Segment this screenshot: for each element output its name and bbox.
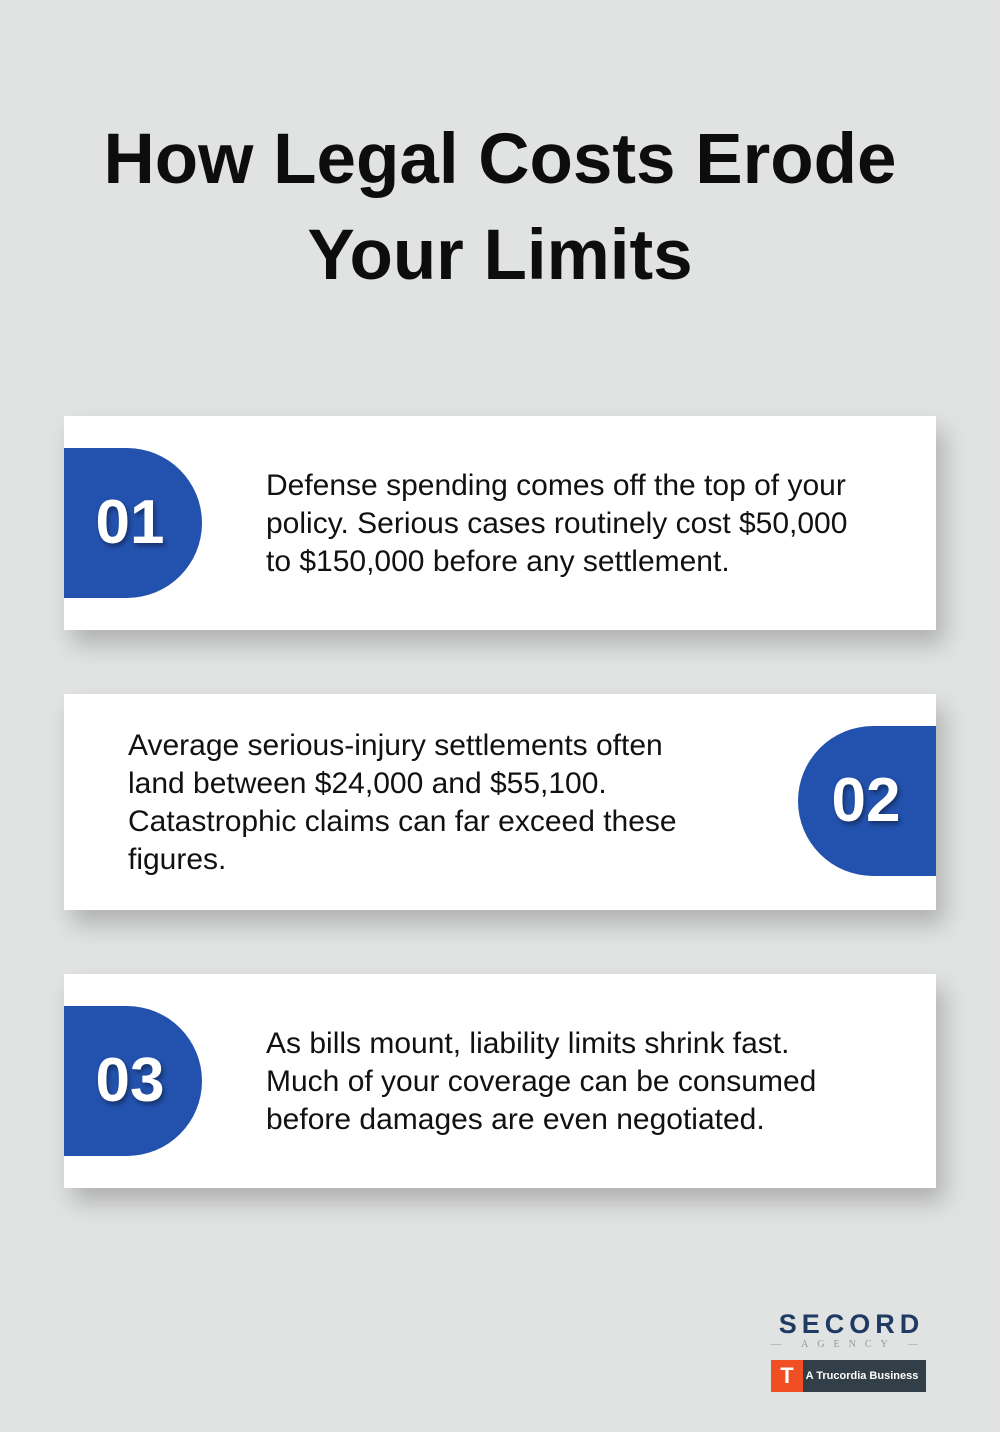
text 1: policy. Serious cases routinely cost $50,000 <box>266 507 847 540</box>
text 1: Defense spending comes off the top of your <box>266 469 846 502</box>
text 2: figures. <box>128 843 226 876</box>
logo <box>771 1309 927 1392</box>
logo wordmark: SECORD <box>779 1309 924 1339</box>
text 3: before damages are even negotiated. <box>266 1103 765 1136</box>
badge 03 <box>64 1006 202 1156</box>
card 2 <box>64 694 936 910</box>
text 3: As bills mount, liability limits shrink fast. <box>266 1027 789 1060</box>
badge 01: 01 <box>96 488 164 557</box>
logo trucordia: T <box>780 1363 794 1388</box>
badge 03: 03 <box>96 1046 164 1115</box>
badge 02 <box>798 726 936 876</box>
title: Your Limits <box>307 216 693 295</box>
badge 01 <box>64 448 202 598</box>
text 1: to $150,000 before any settlement. <box>266 545 730 578</box>
title: How Legal Costs Erode <box>104 120 896 199</box>
text 3: Much of your coverage can be consumed <box>266 1065 816 1098</box>
card 3 <box>64 974 936 1188</box>
text 2: Average serious-injury settlements often <box>128 729 663 762</box>
text 2: land between $24,000 and $55,100. <box>128 767 607 800</box>
badge 02: 02 <box>832 766 900 835</box>
text 2: Catastrophic claims can far exceed these <box>128 805 677 838</box>
text 2 <box>128 729 677 876</box>
logo trucordia: A Trucordia Business <box>806 1370 918 1382</box>
logo trucordia <box>771 1360 926 1392</box>
logo agency: — AGENCY — <box>771 1339 927 1350</box>
text 1 <box>266 469 847 578</box>
title <box>104 120 896 295</box>
card 1 <box>64 416 936 630</box>
text 3 <box>266 1027 816 1136</box>
